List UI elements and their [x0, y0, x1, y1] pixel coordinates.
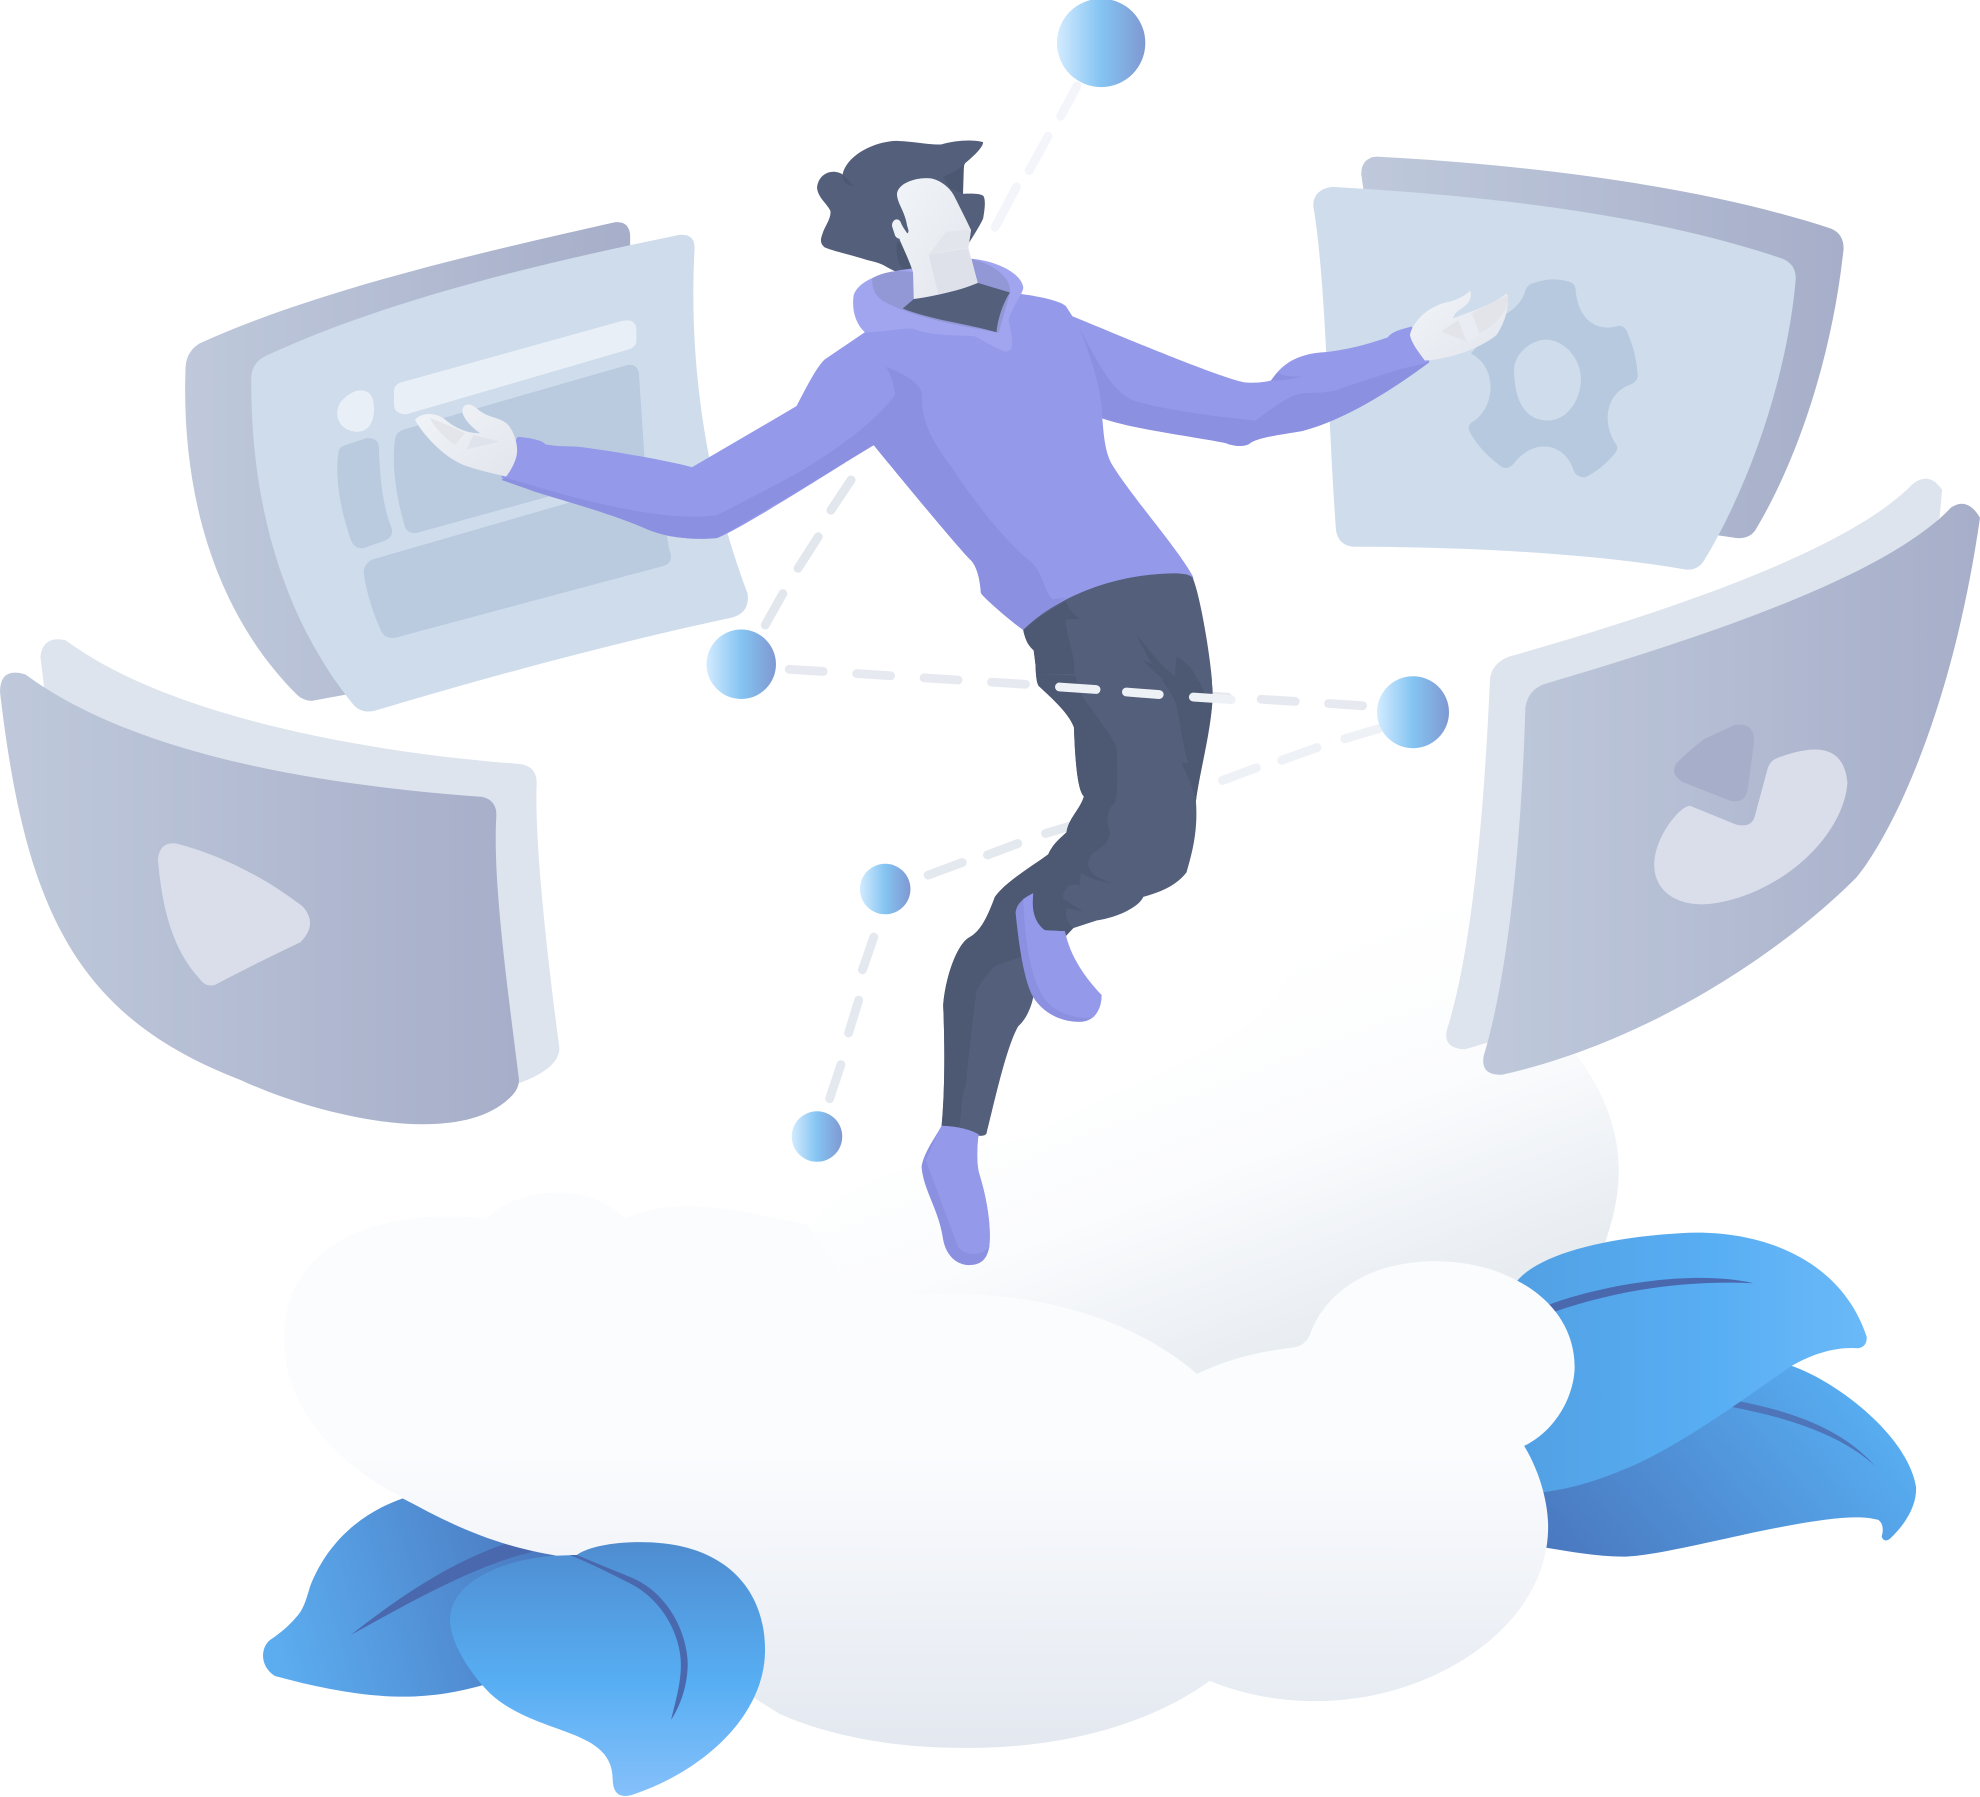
dashed connector lines [765, 86, 1379, 1099]
hair [817, 140, 985, 275]
icon: play [158, 843, 310, 986]
dashes in front of person [1059, 687, 1231, 700]
leaf: right upper [1517, 1233, 1867, 1492]
shirt collar [903, 283, 1010, 332]
icon: pie body [1654, 749, 1847, 904]
panel front [251, 235, 748, 711]
sweater torso and right arm [780, 178, 1429, 693]
leaf: right lower [1530, 1366, 1916, 1557]
left hand [415, 404, 517, 477]
leaf vein [1730, 1400, 1875, 1466]
cloud: back [758, 877, 1619, 1402]
left arm [501, 406, 874, 539]
panel back [185, 222, 630, 701]
hood inner [872, 259, 1010, 333]
panel: top left window [185, 222, 748, 711]
window: light bar [394, 320, 636, 414]
face [897, 178, 978, 299]
panel: bottom left video [0, 639, 559, 1124]
leaf vein [1548, 1278, 1753, 1312]
cloud: front [284, 1193, 1575, 1748]
person [415, 140, 1508, 1265]
foot: lower [922, 1126, 990, 1265]
leaf: bottom left back [263, 1498, 560, 1697]
panel back [1361, 157, 1844, 538]
panel back [40, 639, 559, 1084]
icon: gear [1469, 279, 1638, 477]
panel back [1446, 479, 1942, 1049]
panel front [1483, 504, 1980, 1075]
gear hole [1514, 340, 1581, 421]
panel: top right settings [1313, 157, 1844, 570]
window: wide block [364, 477, 671, 638]
window: content block [394, 365, 645, 533]
panel: right chart [1446, 479, 1980, 1075]
right hand [1410, 291, 1508, 361]
leaf vein [351, 1543, 533, 1635]
leaf vein [570, 1555, 688, 1720]
pants and legs [922, 573, 1213, 1265]
foot: upper [1016, 893, 1102, 1022]
window: side block [337, 438, 392, 548]
hood [853, 259, 1023, 352]
panel front [0, 673, 519, 1124]
leaf: bottom left front [450, 1542, 765, 1796]
icon: pie slice [1674, 725, 1754, 801]
ear [892, 219, 909, 239]
window: small light icon [337, 390, 374, 432]
pants waist overlay [1023, 573, 1212, 682]
panel front [1313, 187, 1796, 570]
node dots [707, 0, 1449, 1162]
